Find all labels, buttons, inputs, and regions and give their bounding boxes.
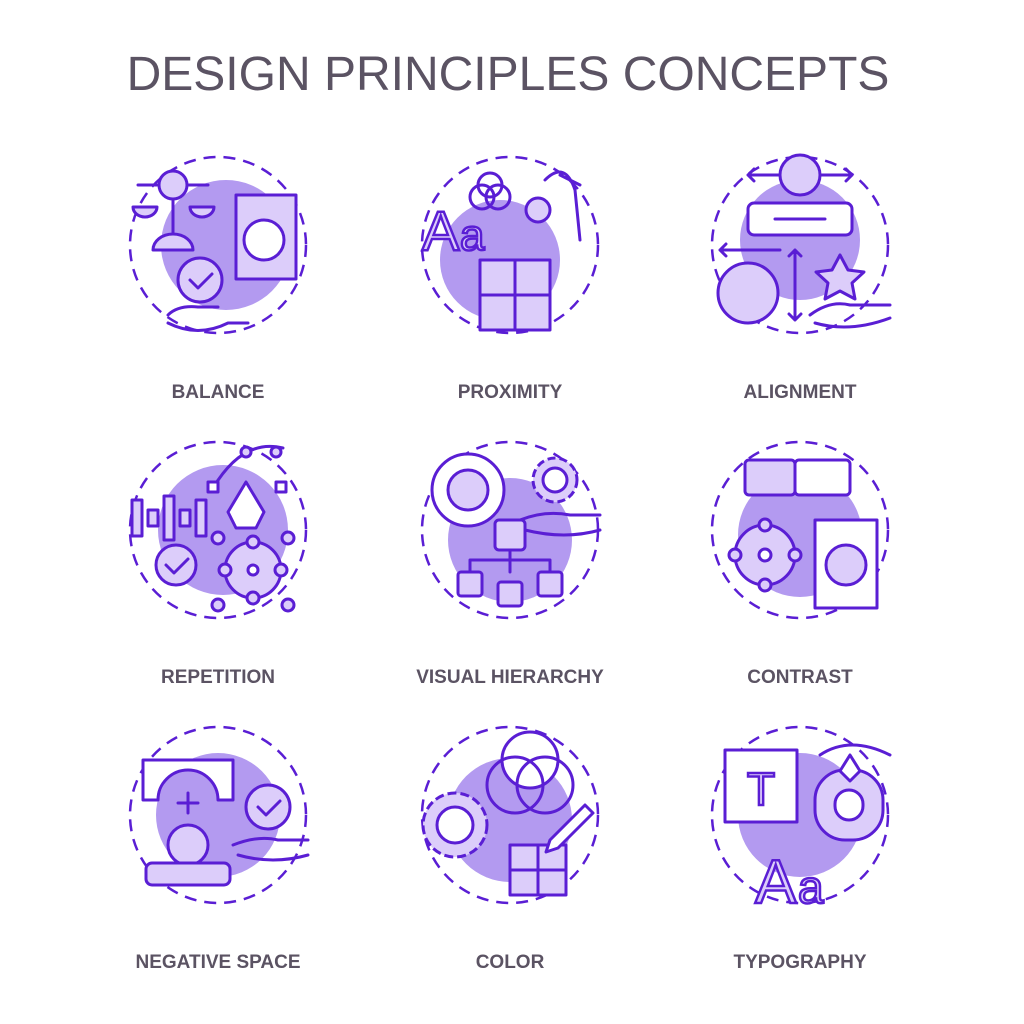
icon: bar <box>146 863 230 885</box>
icon: Aa <box>422 199 485 262</box>
icon: nodes <box>212 532 294 611</box>
icon: arrows <box>720 244 801 320</box>
icon: O with pen <box>815 745 890 840</box>
icon: check <box>156 545 196 585</box>
panel: balance <box>130 157 306 403</box>
icon: top circle + arrows <box>748 155 852 195</box>
icon: circle <box>718 263 778 323</box>
icon: venn <box>487 732 573 813</box>
panel: typography: TYPOGRAPHY <box>733 952 867 973</box>
icon: check <box>246 785 290 829</box>
panel: repetition: REPETITION <box>161 667 275 688</box>
icon: ok hand <box>526 172 580 240</box>
icon: Aa: A <box>755 848 797 917</box>
panel: alignment: ALIGNMENT <box>744 382 857 403</box>
icon: T box: T <box>747 763 775 815</box>
panel: color <box>422 727 598 973</box>
icon: hand <box>233 838 308 860</box>
icon: nodes <box>729 519 801 591</box>
icon: document <box>236 195 296 279</box>
icon: gear <box>533 458 577 502</box>
icon: check <box>178 258 222 302</box>
panel: repetition <box>130 442 306 688</box>
icon: Aa <box>755 848 824 917</box>
panel: negative space: NEGATIVE SPACE <box>135 952 301 973</box>
title: DESIGN PRINCIPLES CONCEPTS <box>127 48 889 101</box>
icon: gear <box>423 793 487 857</box>
icon: T box <box>725 750 797 822</box>
panel: contrast: CONTRAST <box>747 667 853 688</box>
icon: pen <box>208 446 286 528</box>
panel: proximity: PROXIMITY <box>458 382 563 403</box>
icon: dropper <box>546 805 593 852</box>
icon: target <box>432 454 504 526</box>
icon: bar <box>748 203 852 235</box>
panel: typography <box>712 727 890 973</box>
icon: flowchart <box>458 520 562 606</box>
panel: proximity <box>422 157 598 403</box>
panel: contrast <box>712 442 888 688</box>
icon: Aa: a <box>460 211 485 260</box>
panel: visual hierarchy: VISUAL HIERARCHY <box>416 667 604 688</box>
icon: hand <box>520 513 600 535</box>
panel: alignment <box>712 155 890 403</box>
icon: arch <box>143 760 233 813</box>
panel: visual hierarchy <box>416 442 604 688</box>
panel: balance: BALANCE <box>172 382 264 403</box>
icon: bars <box>132 496 206 540</box>
icon: scales <box>133 171 214 250</box>
icon: Aa: A <box>422 199 460 262</box>
icon: star + hand <box>810 255 890 327</box>
icon: circle <box>168 825 208 865</box>
panel: color: COLOR <box>476 952 545 973</box>
panel: negative space <box>130 727 308 973</box>
icon: document <box>815 520 877 608</box>
icon: swatch grid <box>510 845 566 895</box>
icon: puzzle <box>480 260 550 330</box>
icon: hand <box>168 307 248 330</box>
icon: circles <box>470 173 510 209</box>
icon: puzzle <box>745 460 850 495</box>
icon: Aa: a <box>798 861 824 913</box>
